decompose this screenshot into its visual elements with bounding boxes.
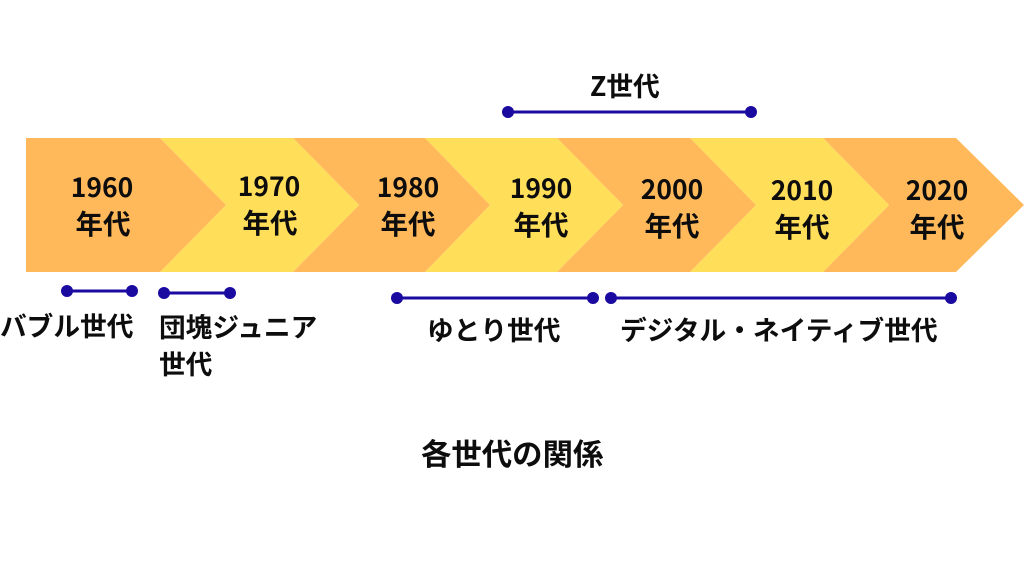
- range: dankai junior generation: [158, 287, 236, 299]
- decade label: 2020s: 年代: [910, 205, 964, 245]
- title: 各世代の関係: [421, 430, 604, 474]
- decade label: 2020s: 2020: [906, 169, 968, 208]
- decade label: 1960s: 年代: [76, 202, 130, 242]
- label: bubble generation: バブル世代: [0, 305, 134, 344]
- decade label: 2010s: 2010: [771, 169, 833, 208]
- decade label: 2000s: 年代: [644, 204, 700, 244]
- range: Z generation: [502, 106, 757, 118]
- decade label: 2010s: 年代: [774, 205, 830, 245]
- decade label: 1960s: 1960: [71, 166, 133, 205]
- range: bubble generation: [61, 285, 138, 297]
- decade label: 1990s: 年代: [514, 203, 568, 243]
- decade label: 2000s: 2000: [641, 168, 703, 207]
- label: digital native generation: デジタル・ネイティブ世代: [620, 309, 938, 348]
- decade label: 1980s: 1980: [377, 166, 439, 205]
- decade label: 1970s: 年代: [242, 201, 298, 241]
- decade label: 1970s: 1970: [238, 165, 300, 204]
- decade label: 1990s: 1990: [510, 167, 572, 206]
- label: dankai junior generation: 団塊ジュニア: [159, 306, 317, 345]
- label: dankai junior generation: 世代: [159, 343, 213, 382]
- decade label: 1980s: 年代: [380, 202, 436, 242]
- label: Z generation: Z世代: [590, 65, 660, 104]
- label: yutori generation: ゆとり世代: [427, 309, 561, 348]
- range: yutori generation: [391, 292, 599, 304]
- timeline arrow band: [26, 138, 1024, 272]
- range: digital native generation: [605, 292, 957, 304]
